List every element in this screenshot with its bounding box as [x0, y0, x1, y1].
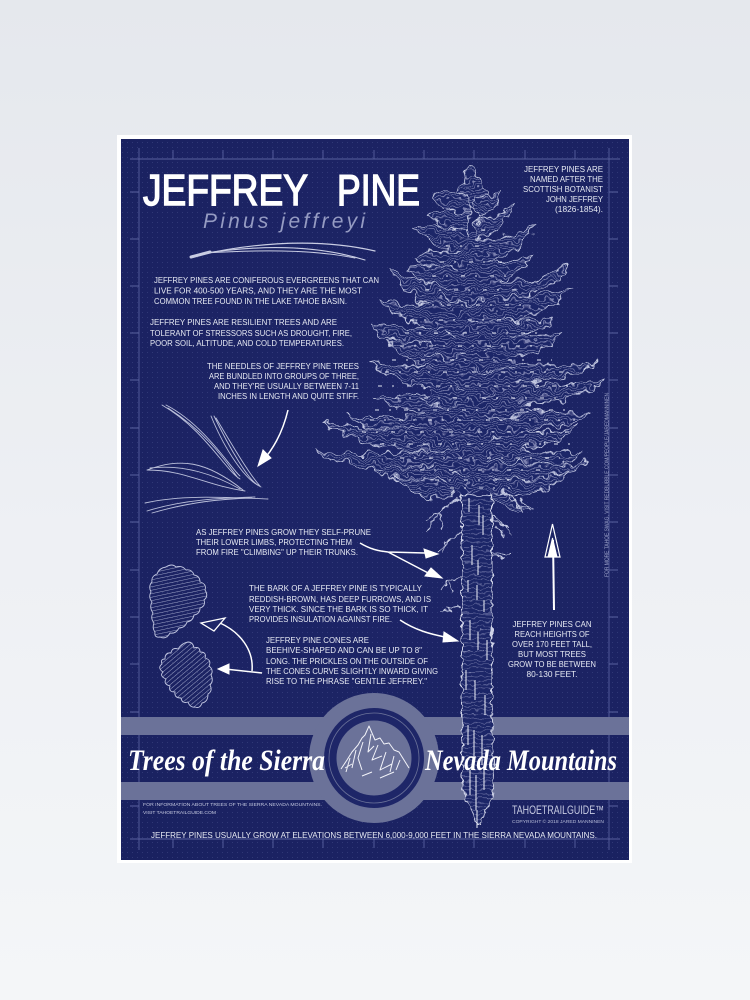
text: John Jeffrey namesake: JOHN JEFFREY — [546, 195, 604, 204]
copyright: COPYRIGHT © 2018 JARED MANNINEN — [512, 818, 604, 824]
text: cones: RISE TO THE PHRASE "GENTLE JEFFREY." — [266, 677, 427, 686]
canopy highlights — [362, 230, 575, 488]
text: height: REACH HEIGHTS OF — [514, 630, 590, 639]
text: resilience — [150, 318, 352, 348]
canopy inner branch outlines — [416, 296, 530, 480]
text: bark: PROVIDES INSULATION AGAINST FIRE. — [249, 615, 392, 624]
text: cones: LONG. THE PRICKLES ON THE OUTSIDE OF — [266, 657, 428, 666]
text: height: JEFFREY PINES CAN — [512, 620, 592, 629]
arrow: to needles — [258, 410, 288, 466]
text: self-pruning: FROM FIRE "CLIMBING" UP THEIR TRUNKS. — [196, 548, 358, 557]
text: John Jeffrey namesake: JEFFREY PINES ARE — [524, 165, 603, 174]
title: PINE — [337, 166, 420, 215]
text: self-pruning: THEIR LOWER LIMBS, PROTECTING THEM — [196, 538, 352, 547]
text: John Jeffrey namesake — [523, 165, 604, 214]
text: needles: AND THEY'RE USUALLY BETWEEN 7-11 — [214, 382, 360, 391]
trunk bark marks — [466, 498, 487, 828]
canopy core — [424, 230, 526, 494]
illustration: upper cone — [150, 565, 207, 638]
text: cones: THE CONES CURVE SLIGHTLY INWARD GIVING — [266, 667, 438, 676]
text: lifespan: JEFFREY PINES ARE CONIFEROUS EVERGREENS THAT CAN — [154, 276, 379, 285]
vertical credit text: FOR MORE TAHOE SWAG, VISIT REDBUBBLE.COM/PEOPLE/JAREDMANNINEN — [604, 393, 610, 577]
text: height: GROW TO BE BETWEEN — [508, 660, 596, 669]
text: John Jeffrey namesake: SCOTTISH BOTANIST — [523, 185, 603, 194]
trunk — [462, 495, 494, 826]
text: resilience: JEFFREY PINES ARE RESILIENT TREES AND ARE — [150, 318, 337, 327]
text: bark: VERY THICK. SINCE THE BARK IS SO THICK, IT — [249, 605, 428, 614]
text: John Jeffrey namesake: (1826-1854). — [555, 205, 603, 214]
info text — [143, 802, 322, 815]
arrows: to pruned limbs — [360, 543, 442, 578]
arrows: to cones — [201, 618, 262, 674]
text: John Jeffrey namesake: NAMED AFTER THE — [530, 175, 603, 184]
text: elevation: JEFFREY PINES USUALLY GROW AT ELEVATIONS BETWEEN 6,000-9,000 FEET IN THE SIERRA NEVADA MOUNTAINS. — [151, 831, 597, 840]
text: needles: THE NEEDLES OF JEFFREY PINE TREES — [207, 362, 359, 371]
banner script: right: Nevada Mountains — [424, 744, 617, 777]
icon: mountain — [341, 726, 409, 778]
illustration: lower cone — [160, 642, 212, 708]
text: height: 80-130 FEET. — [526, 670, 578, 679]
text: lifespan — [154, 276, 379, 306]
text: bark: THE BARK OF A JEFFREY PINE IS TYPICALLY — [249, 584, 423, 593]
logo: Tahoe Trail Guide: TAHOETRAILGUIDE™ — [512, 803, 604, 817]
text: cones — [266, 636, 438, 686]
badge circle — [309, 693, 439, 823]
arrow: to bark — [400, 620, 458, 642]
text: bark — [249, 584, 431, 624]
info text: VISIT TAHOETRAILGUIDE.COM — [143, 810, 216, 815]
illustration: single needle bundle — [191, 243, 375, 260]
text: self-pruning: AS JEFFREY PINES GROW THEY SELF-PRUNE — [196, 528, 371, 537]
jeffrey pine tree illustration — [315, 166, 607, 828]
arrow: height — [545, 524, 560, 610]
text: resilience: POOR SOIL, ALTITUDE, AND COLD TEMPERATURES. — [150, 339, 344, 348]
text: needles: INCHES IN LENGTH AND QUITE STIFF. — [218, 392, 359, 401]
text: bark: REDDISH-BROWN, HAS DEEP FURROWS, AND IS — [249, 595, 431, 604]
text: lifespan: LIVE FOR 400-500 YEARS, AND THEY ARE THE MOST — [154, 286, 362, 296]
text: lifespan: COMMON TREE FOUND IN THE LAKE TAHOE BASIN. — [154, 297, 347, 306]
text: needles — [207, 362, 360, 401]
lower dead limbs — [425, 496, 530, 612]
text: cones: JEFFREY PINE CONES ARE — [266, 636, 369, 645]
illustration: needle clusters — [145, 405, 268, 513]
tree canopy — [315, 166, 607, 510]
text: cones: BEEHIVE-SHAPED AND CAN BE UP TO 8" — [266, 646, 422, 655]
text: height: BUT MOST TREES — [518, 650, 586, 659]
poster frame — [117, 135, 632, 863]
banner stripes — [121, 717, 629, 800]
text: needles: ARE BUNDLED INTO GROUPS OF THREE, — [209, 372, 359, 381]
info text: FOR INFORMATION ABOUT TREES OF THE SIERRA NEVADA MOUNTAINS. — [143, 802, 322, 807]
subtitle: Latin name: Pinus jeffreyi — [203, 210, 366, 233]
text: self-pruning — [196, 528, 371, 557]
text: resilience: TOLERANT OF STRESSORS SUCH AS DROUGHT, FIRE, — [150, 329, 352, 338]
title: JEFFREY — [143, 166, 308, 215]
text: height: OVER 170 FEET TALL, — [512, 640, 592, 649]
banner — [121, 693, 629, 823]
banner script: left: Trees of the Sierra — [128, 744, 325, 777]
text: height — [508, 620, 596, 679]
